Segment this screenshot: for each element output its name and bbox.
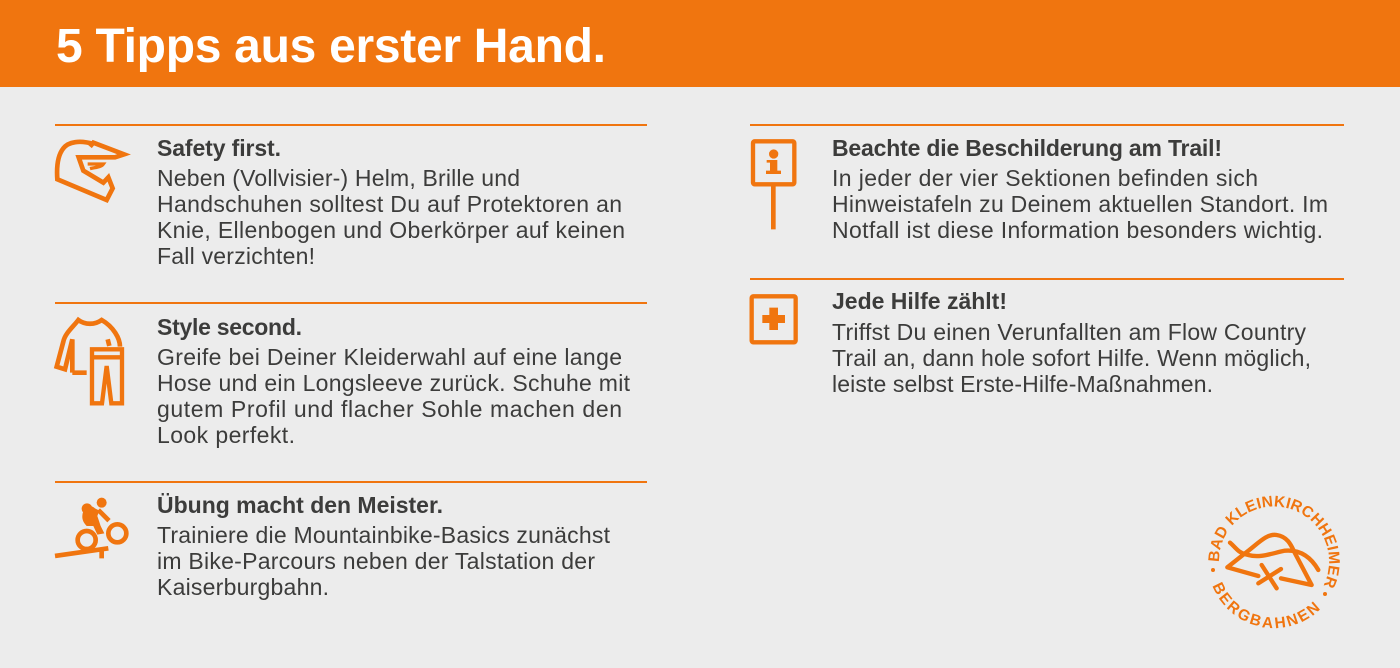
text block: Look perfekt. <box>157 422 295 448</box>
title: 5 Tipps aus erster Hand. <box>56 20 606 73</box>
text block: In jeder der vier Sektionen befinden sich <box>832 165 1258 191</box>
text block: Trainiere die Mountainbike-Basics zunächst <box>157 522 611 548</box>
text block: Hinweistafeln zu Deinem aktuellen Standort. Im <box>832 191 1328 217</box>
logo: Bad Kleinkirchheimer Bergbahnen: BAD KLEINKIRCHHEIMER <box>1208 496 1340 588</box>
icon: helmet <box>57 142 124 200</box>
text block: Greife bei Deiner Kleiderwahl auf eine lange <box>157 344 622 370</box>
panel: safety first <box>55 125 647 269</box>
text block <box>157 522 611 600</box>
text block: Knie, Ellenbogen und Oberkörper auf keinen <box>157 217 625 243</box>
header banner <box>0 0 1400 87</box>
panel: first aid <box>750 279 1344 397</box>
text block: im Bike-Parcours neben der Talstation der <box>157 548 595 574</box>
text block <box>157 165 625 269</box>
logo: Bad Kleinkirchheimer Bergbahnen: BERGBAHNEN <box>1212 582 1320 628</box>
text block <box>832 165 1328 243</box>
text block: gutem Profil und flacher Sohle machen den <box>157 396 622 422</box>
heading: Safety first. <box>157 135 281 161</box>
text block: Neben (Vollvisier-) Helm, Brille und <box>157 165 520 191</box>
text block: Hose und ein Longsleeve zurück. Schuhe mit <box>157 370 631 396</box>
panel: style second <box>55 303 647 448</box>
text block: leiste selbst Erste-Hilfe-Maßnahmen. <box>832 371 1213 397</box>
text block: Fall verzichten! <box>157 243 315 269</box>
icon: information sign <box>753 141 794 229</box>
text block <box>832 319 1311 397</box>
logo: Bad Kleinkirchheimer Bergbahnen <box>1208 496 1340 628</box>
panel: signage <box>750 125 1344 243</box>
heading: Jede Hilfe zählt! <box>832 288 1007 314</box>
heading: Beachte die Beschilderung am Trail! <box>832 135 1222 161</box>
text block: Handschuhen solltest Du auf Protektoren an <box>157 191 622 217</box>
heading: Style second. <box>157 314 302 340</box>
text block: Trail an, dann hole sofort Hilfe. Wenn möglich, <box>832 345 1311 371</box>
icon: clothing <box>57 320 122 403</box>
heading: Übung macht den Meister. <box>157 492 443 518</box>
text block: Triffst Du einen Verunfallten am Flow Country <box>832 319 1306 345</box>
text block: Notfall ist diese Information besonders wichtig. <box>832 217 1323 243</box>
text block <box>157 344 631 448</box>
text block: Kaiserburgbahn. <box>157 574 329 600</box>
panel: practice <box>55 482 647 600</box>
icon: mountain biker <box>55 498 126 558</box>
icon: first aid cross <box>752 296 796 342</box>
